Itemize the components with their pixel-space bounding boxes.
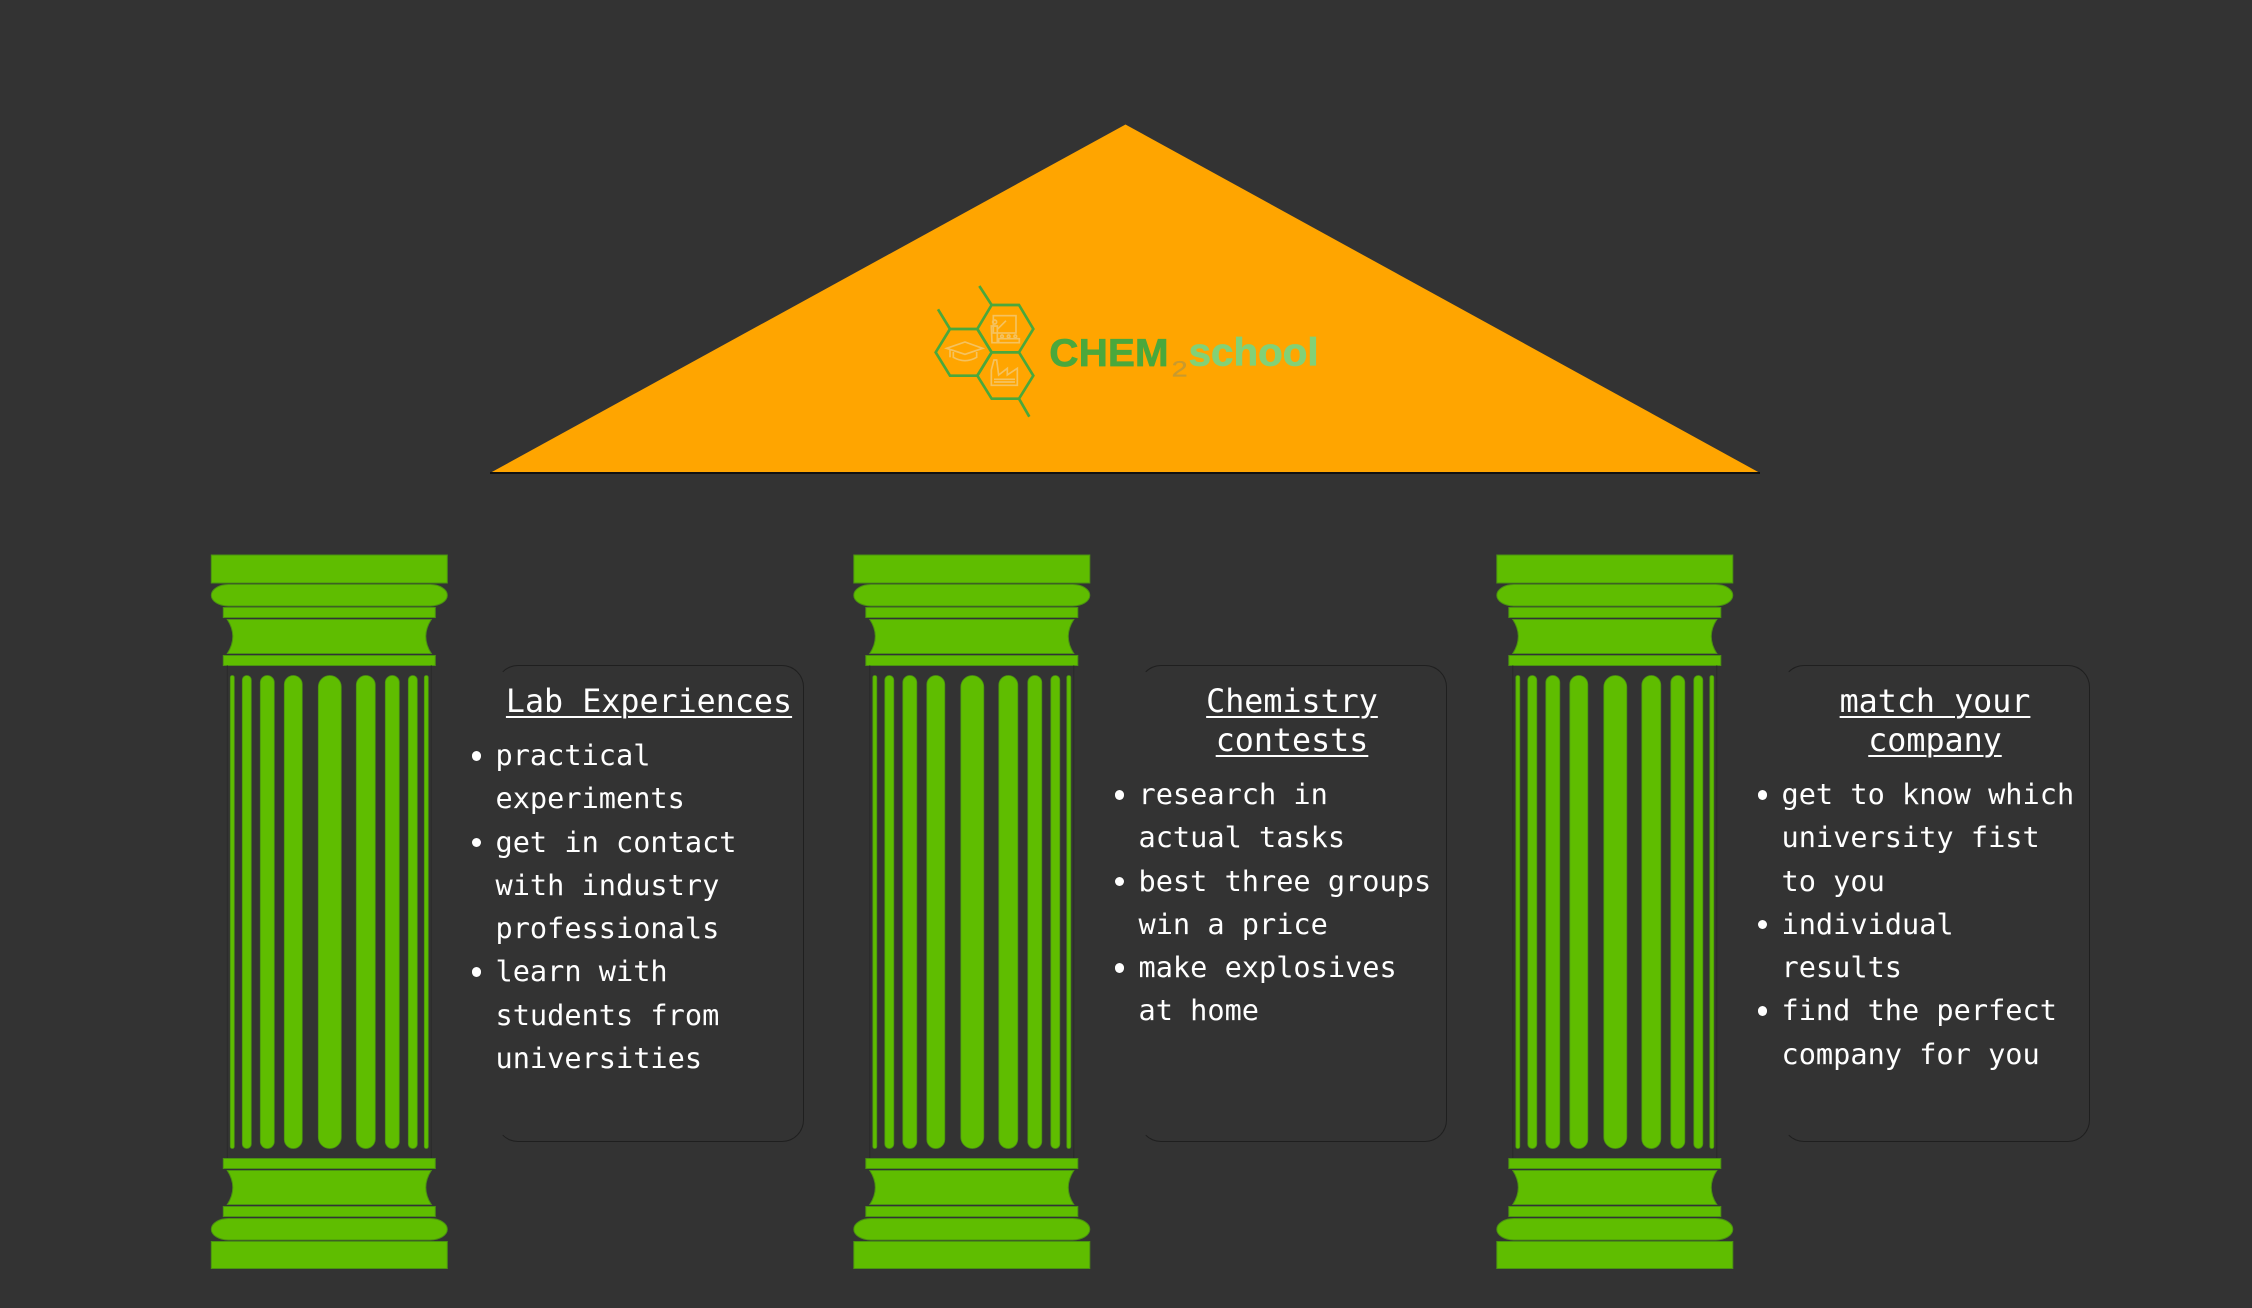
icon: hexagon molecule bbox=[936, 286, 1033, 417]
list: company bullet points bbox=[1758, 777, 2074, 1071]
pillar 1 bbox=[211, 555, 447, 1268]
list: company bullet points: individual results bbox=[1782, 907, 1954, 984]
icon: factory bbox=[991, 360, 1017, 385]
pillar 2 bbox=[854, 555, 1090, 1268]
icon: teacher at board bbox=[991, 316, 1019, 343]
heading: Lab Experiences: Lab Experiences bbox=[506, 684, 792, 720]
list: lab bullet points: get in contact with industry professionals bbox=[496, 825, 737, 945]
heading: Chemistry contests: contests bbox=[1216, 722, 1368, 758]
pillar shaft flutes bbox=[1516, 676, 1714, 1148]
heading: match your company: company bbox=[1868, 722, 2002, 758]
list: contest bullet points: best three groups win a price bbox=[1138, 864, 1431, 941]
list: company bullet points: find the perfect company for you bbox=[1782, 993, 2057, 1071]
heading: Chemistry contests: Chemistry bbox=[1206, 684, 1378, 720]
pillar shaft outline bbox=[1513, 666, 1717, 1158]
list: company bullet points: get to know which university fist to you bbox=[1782, 777, 2074, 898]
logo: CHEM2school: 2 bbox=[1172, 357, 1188, 382]
list: contest bullet points bbox=[1115, 777, 1431, 1027]
list: lab bullet points bbox=[472, 738, 737, 1075]
pillar capital bbox=[1497, 555, 1733, 666]
pillar shaft flutes bbox=[230, 676, 428, 1148]
logo: CHEM2school bbox=[936, 286, 1319, 417]
list: lab bullet points: practical experiments bbox=[496, 738, 685, 815]
heading: match your company bbox=[1840, 684, 2030, 758]
logo: CHEM2school: school bbox=[1189, 330, 1319, 374]
panel: match your company bbox=[1782, 665, 2090, 1142]
pillar shaft flutes bbox=[873, 676, 1071, 1148]
icon: graduation cap bbox=[947, 342, 983, 361]
roof triangle bbox=[490, 124, 1760, 473]
pillar base bbox=[854, 1158, 1090, 1268]
pillar capital bbox=[854, 555, 1090, 666]
panel: Chemistry contests bbox=[1139, 665, 1447, 1142]
pillar base bbox=[211, 1158, 447, 1268]
pillar 3 bbox=[1497, 555, 1733, 1268]
list: lab bullet points: learn with students from universities bbox=[496, 954, 719, 1075]
pillar capital bbox=[211, 555, 447, 666]
pillar shaft outline bbox=[227, 666, 431, 1158]
panel: Lab Experiences bbox=[496, 665, 804, 1142]
heading: Chemistry contests bbox=[1206, 684, 1378, 758]
list: contest bullet points: make explosives at home bbox=[1138, 950, 1397, 1027]
pillar base bbox=[1497, 1158, 1733, 1268]
pillar shaft outline bbox=[870, 666, 1074, 1158]
list: contest bullet points: research in actual tasks bbox=[1138, 777, 1345, 854]
heading: match your company: match your bbox=[1840, 684, 2030, 720]
logo wordmark: CHEM bbox=[1049, 331, 1169, 375]
